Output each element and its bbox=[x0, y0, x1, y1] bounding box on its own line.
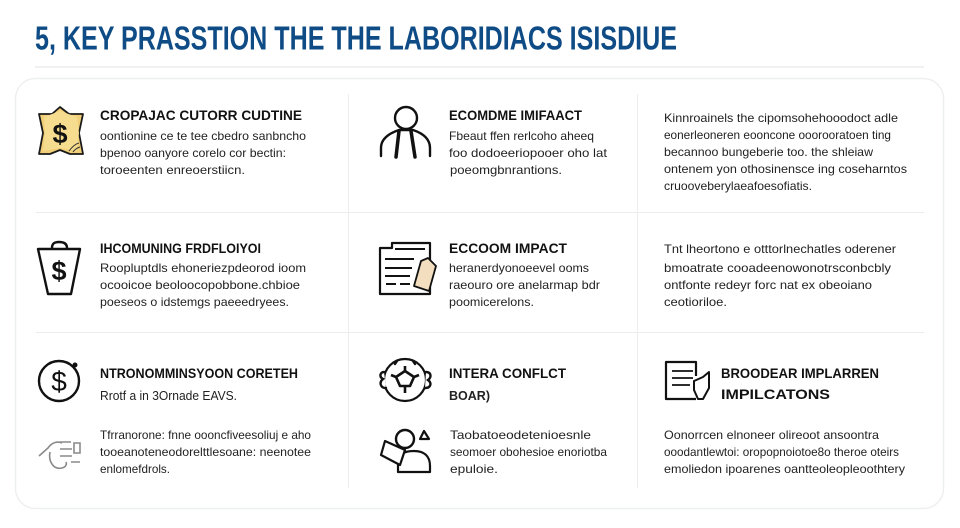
text block: emoliedon ipoarenes oantteoleopleoothtery bbox=[664, 462, 905, 476]
text block: Roopluptdls ehoneriezpdeorod ioom bbox=[100, 261, 306, 275]
panel: row 3 column 1 bbox=[39, 361, 311, 476]
subheading: Rrotf a in 3Ornade EAVS. bbox=[100, 388, 237, 403]
icon: document with shield bbox=[666, 362, 709, 399]
text block bbox=[100, 428, 311, 476]
text block: raeouro ore anelarmap bdr bbox=[449, 278, 600, 292]
panel: row 2 column 2 bbox=[380, 240, 600, 309]
panel: row 2 column 1 bbox=[38, 240, 306, 309]
icon: dollar coin: $ bbox=[51, 366, 67, 397]
icon: money bag: $ bbox=[51, 256, 67, 286]
text block: cruooveberylaeafoesofiatis. bbox=[664, 179, 812, 193]
heading bbox=[721, 365, 879, 402]
icon: grey connected gadgets bbox=[39, 442, 80, 468]
subheading: BOAR) bbox=[449, 388, 490, 403]
text block: poomicerelons. bbox=[449, 295, 534, 309]
text block: Oonorrcen elnoneer olireoot ansoontra bbox=[664, 428, 879, 442]
text block: heranerdyonoeevel ooms bbox=[449, 261, 589, 275]
text block: ocooicoe beoloocopobbone.chbioe bbox=[100, 278, 300, 292]
text block: poeseos o idstemgs paeeedryees. bbox=[100, 295, 289, 309]
panel: row 1 column 2 bbox=[381, 107, 608, 177]
text block: toroeenten enreoerstiicn. bbox=[100, 163, 245, 177]
panel: row 1 column 3 bbox=[664, 111, 907, 193]
icon: document and clipboard bbox=[380, 243, 436, 294]
panel: row 2 column 3 bbox=[664, 242, 896, 309]
icon: person with tie bbox=[381, 107, 430, 157]
text block: foo dodoeeriopooer oho lat bbox=[449, 146, 608, 160]
icon: gold dollar badge bbox=[39, 107, 83, 154]
heading: ECOMDME IMIFAACT bbox=[449, 107, 582, 123]
text block: Taobatoeodetenioesnle bbox=[450, 428, 591, 442]
text block bbox=[100, 129, 306, 177]
icon: money bag bbox=[38, 242, 80, 294]
heading: BROODEAR IMPLARREN bbox=[721, 365, 879, 381]
text block: oontionine ce te tee cbedro sanbncho bbox=[100, 129, 306, 143]
text block bbox=[450, 428, 607, 476]
heading: ECCOOM IMPACT bbox=[449, 240, 567, 256]
panel: row 3 column 2 bbox=[380, 359, 607, 476]
text block bbox=[664, 428, 905, 476]
text block: poeomgbnrantions. bbox=[450, 163, 562, 177]
text block: ontfonte redeyr forc nat ex obeoiano bbox=[664, 278, 872, 292]
heading: CROPAJAC CUTORR CUDTINE bbox=[100, 107, 302, 123]
text block: ontenem yon othosinensce ing coseharntos bbox=[664, 162, 907, 176]
text block: epuloie. bbox=[450, 462, 498, 476]
card panel bbox=[16, 78, 944, 508]
heading: IMPILCATONS bbox=[721, 386, 830, 402]
text block bbox=[664, 111, 907, 193]
text block: bpenoo oanyore corelo cor bectin: bbox=[100, 146, 286, 160]
icon: gold dollar badge: $ bbox=[52, 119, 68, 149]
text block: bmoatrate cooadeenowonotrsconbcbly bbox=[664, 261, 891, 275]
icon: person reading paper bbox=[381, 430, 430, 472]
text block: becannoo bungeberie too. the shleiaw bbox=[664, 145, 873, 159]
text block: Kinnroainels the cipomsohehooodoct adle bbox=[664, 111, 898, 125]
text block: seomoer obohesioe enoriotba bbox=[450, 445, 607, 459]
text block: ceotioriloe. bbox=[664, 295, 727, 309]
heading: IHCOMUNING FRDFLOIYOI bbox=[100, 240, 261, 256]
text block: Tfrranorone: fnne oooncfiveesoliuj e aho bbox=[100, 428, 311, 442]
text block bbox=[449, 261, 600, 309]
heading: INTERA CONFLCT bbox=[449, 365, 566, 381]
text block bbox=[100, 261, 306, 309]
text block bbox=[664, 242, 896, 309]
panel: row 1 column 1 bbox=[39, 107, 306, 177]
text block: ooodantlewtoi: oropopnoiotoe8o theroe oteirs bbox=[664, 445, 899, 459]
panel: row 3 column 3 bbox=[664, 362, 905, 476]
heading: NTRONOMMINSYOON CORETEH bbox=[100, 365, 298, 381]
icon: dollar coin bbox=[39, 361, 79, 401]
text block: enlomefdrols. bbox=[100, 462, 170, 476]
text block: tooeanoteneodorelttlesoane: neenotee bbox=[100, 445, 311, 459]
title: 5, KEY PRASSTION THE THE LABORIDIACS ISISDIUE bbox=[35, 20, 677, 56]
icon: globe network bbox=[380, 359, 430, 401]
text block: eonerleoneren eooncone ooorooratoen ting bbox=[664, 128, 891, 142]
text block: Tnt lheortono e otttorlnechatles oderener bbox=[664, 242, 896, 256]
text block bbox=[449, 129, 608, 177]
text block: Fbeaut ffen rerlcoho aheeq bbox=[449, 129, 594, 143]
